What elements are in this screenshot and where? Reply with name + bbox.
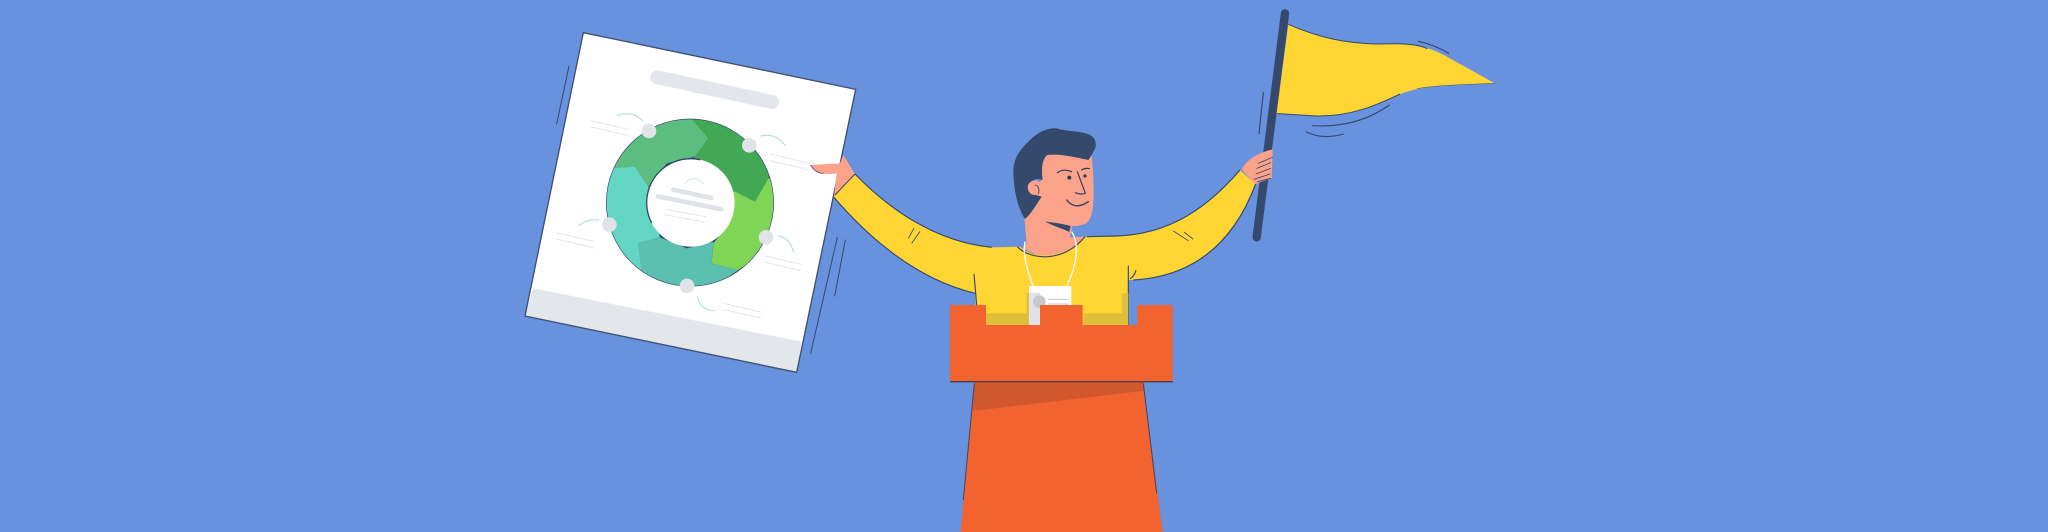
shirt — [833, 170, 1256, 327]
segment: blue teal — [638, 238, 738, 286]
tower — [950, 305, 1173, 532]
head — [1013, 128, 1096, 232]
panel: chart poster — [525, 33, 856, 372]
ring nodes — [602, 124, 773, 293]
ring centre — [647, 159, 735, 247]
flag — [1277, 24, 1495, 116]
poster sheet — [525, 33, 856, 372]
right hand — [1242, 149, 1273, 184]
hair — [1013, 128, 1096, 219]
neck — [1023, 213, 1086, 259]
left hand — [811, 155, 855, 196]
face — [1027, 143, 1094, 226]
note lines — [555, 121, 810, 318]
poster outline — [525, 33, 856, 372]
ring chart — [606, 118, 774, 286]
lanyard — [1024, 232, 1076, 287]
ear — [1028, 180, 1042, 195]
flag pole — [1257, 13, 1285, 237]
node arcs — [579, 114, 793, 311]
battlements — [950, 305, 1173, 382]
battlement base line — [950, 380, 1173, 384]
tower edge lines — [963, 383, 1157, 500]
flag and pole — [1257, 13, 1495, 237]
segment: lime — [712, 178, 774, 270]
neck shadow — [1045, 222, 1071, 232]
id badge — [1029, 286, 1071, 325]
face details — [1035, 168, 1089, 206]
poster footer band — [525, 288, 802, 372]
character: presenter — [811, 128, 1273, 327]
tower body — [961, 382, 1163, 532]
flag motion lines — [1259, 41, 1449, 137]
segment: teal — [606, 166, 660, 270]
illustration: presenter on a tower with chart and flag — [524, 9, 1495, 532]
shirt shadow — [986, 293, 1128, 325]
segment: dark green — [692, 120, 769, 202]
flag edge lines — [1277, 24, 1495, 116]
tower shadow — [973, 382, 1145, 411]
motion lines: poster — [557, 66, 845, 353]
segment: light green — [611, 119, 708, 186]
ring outline — [606, 119, 774, 287]
centre text bars — [658, 178, 721, 222]
poster title bar — [657, 77, 772, 102]
shirt outline — [833, 170, 1256, 325]
